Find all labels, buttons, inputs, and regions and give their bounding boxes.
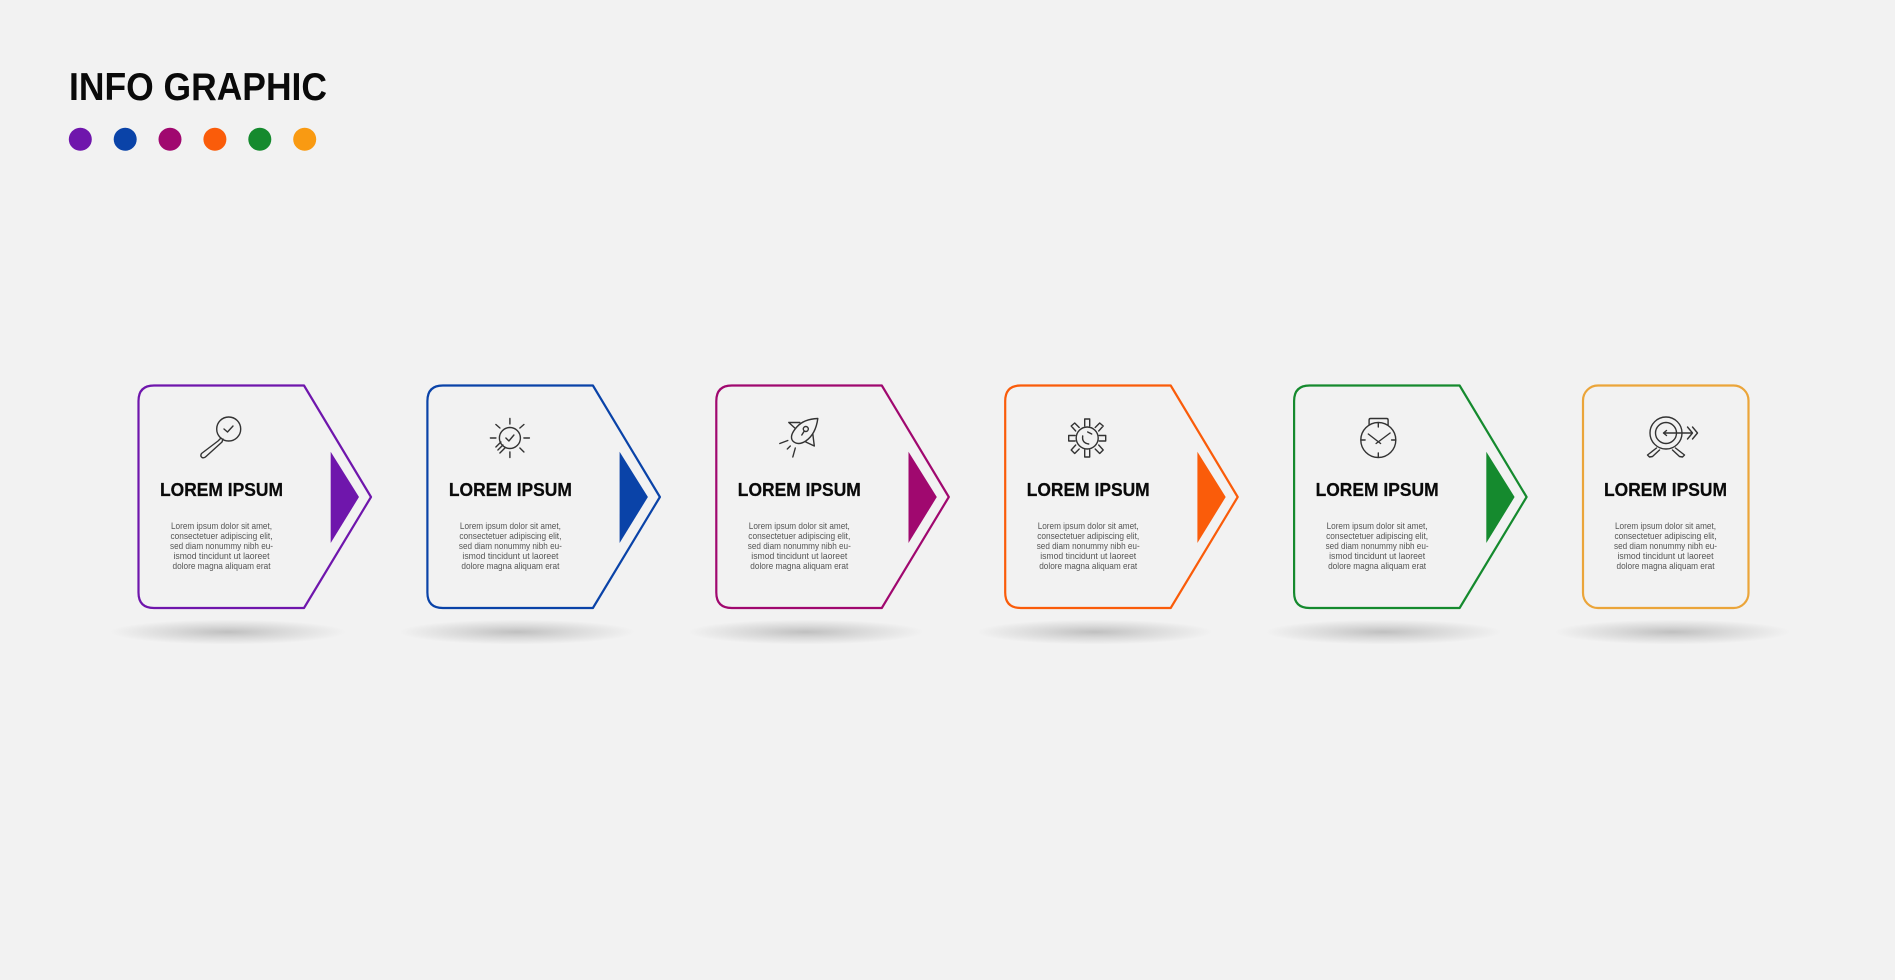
title: INFO GRAPHIC xyxy=(69,66,327,109)
icon: light bulb sun xyxy=(490,418,529,458)
icon: sun gear xyxy=(1069,419,1106,457)
body text 6: dolore magna aliquam erat xyxy=(1616,560,1715,571)
body text 2: Lorem ipsum dolor sit amet, xyxy=(460,520,561,531)
shadow 6 xyxy=(1554,620,1790,644)
body text 6: sed diam nonummy nibh eu- xyxy=(1614,540,1717,551)
icon: rocket xyxy=(780,418,818,457)
heading 4: LOREM IPSUM xyxy=(1027,479,1150,500)
body text 3: Lorem ipsum dolor sit amet, xyxy=(749,520,850,531)
body text 2 xyxy=(459,520,562,571)
body text 1: dolore magna aliquam erat xyxy=(172,560,271,571)
panel: step 1 xyxy=(110,386,371,644)
body text 1: sed diam nonummy nibh eu- xyxy=(170,540,273,551)
body text 1: consectetuer adipiscing elit, xyxy=(170,530,272,541)
heading 1: LOREM IPSUM xyxy=(160,479,283,500)
body text 4: ismod tincidunt ut laoreet xyxy=(1040,550,1137,561)
card outline 3 xyxy=(716,386,949,608)
body text 2: consectetuer adipiscing elit, xyxy=(459,530,561,541)
shadow 5 xyxy=(1266,620,1502,644)
arrow 3 xyxy=(908,452,937,543)
panel: step 2 xyxy=(399,386,660,644)
body text 6: consectetuer adipiscing elit, xyxy=(1614,530,1716,541)
card outline 6 xyxy=(1583,386,1748,608)
icon: magnifier xyxy=(201,417,241,458)
panel: step 5 xyxy=(1266,386,1527,644)
legend dots xyxy=(69,128,316,151)
body text 3: dolore magna aliquam erat xyxy=(750,560,849,571)
body text 3: ismod tincidunt ut laoreet xyxy=(751,550,848,561)
shadow 3 xyxy=(688,620,924,644)
body text 2: sed diam nonummy nibh eu- xyxy=(459,540,562,551)
body text 5: dolore magna aliquam erat xyxy=(1328,560,1426,571)
card outline 1 xyxy=(138,386,371,608)
arrow 2 xyxy=(620,452,648,543)
body text 6: Lorem ipsum dolor sit amet, xyxy=(1615,520,1716,531)
body text 2: dolore magna aliquam erat xyxy=(461,560,560,571)
panel: step 3 xyxy=(688,386,949,644)
body text 1: ismod tincidunt ut laoreet xyxy=(174,550,270,561)
body text 6 xyxy=(1614,520,1717,571)
card outline 4 xyxy=(1005,386,1238,608)
heading 5: LOREM IPSUM xyxy=(1316,479,1439,500)
body text 3 xyxy=(748,520,851,571)
heading 6: LOREM IPSUM xyxy=(1604,479,1727,500)
body text 4: sed diam nonummy nibh eu- xyxy=(1037,540,1140,551)
body text 5 xyxy=(1326,520,1429,571)
icon: stopwatch xyxy=(1361,418,1396,458)
heading 3: LOREM IPSUM xyxy=(738,479,861,500)
card outline 5 xyxy=(1294,386,1527,608)
body text 4: Lorem ipsum dolor sit amet, xyxy=(1038,520,1139,531)
icon: target xyxy=(1648,417,1698,457)
body text 4 xyxy=(1037,520,1140,571)
panel: step 6 xyxy=(1554,386,1790,644)
body text 3: sed diam nonummy nibh eu- xyxy=(748,540,851,551)
card outline 2 xyxy=(427,386,660,608)
body text 5: ismod tincidunt ut laoreet xyxy=(1329,550,1425,561)
body text 4: consectetuer adipiscing elit, xyxy=(1037,530,1139,541)
body text 2: ismod tincidunt ut laoreet xyxy=(462,550,559,561)
body text 5: sed diam nonummy nibh eu- xyxy=(1326,540,1429,551)
body text 1: Lorem ipsum dolor sit amet, xyxy=(171,520,272,531)
body text 1 xyxy=(170,520,273,571)
panel: step 4 xyxy=(977,386,1238,644)
arrow 5 xyxy=(1486,452,1515,543)
body text 4: dolore magna aliquam erat xyxy=(1039,560,1138,571)
heading 2: LOREM IPSUM xyxy=(449,479,572,500)
body text 5: Lorem ipsum dolor sit amet, xyxy=(1327,520,1428,531)
arrow 1 xyxy=(331,452,359,543)
shadow 1 xyxy=(110,620,346,644)
body text 5: consectetuer adipiscing elit, xyxy=(1326,530,1428,541)
body text 3: consectetuer adipiscing elit, xyxy=(748,530,850,541)
shadow 4 xyxy=(977,620,1213,644)
body text 6: ismod tincidunt ut laoreet xyxy=(1618,550,1714,561)
shadow 2 xyxy=(399,620,635,644)
arrow 4 xyxy=(1197,452,1226,543)
